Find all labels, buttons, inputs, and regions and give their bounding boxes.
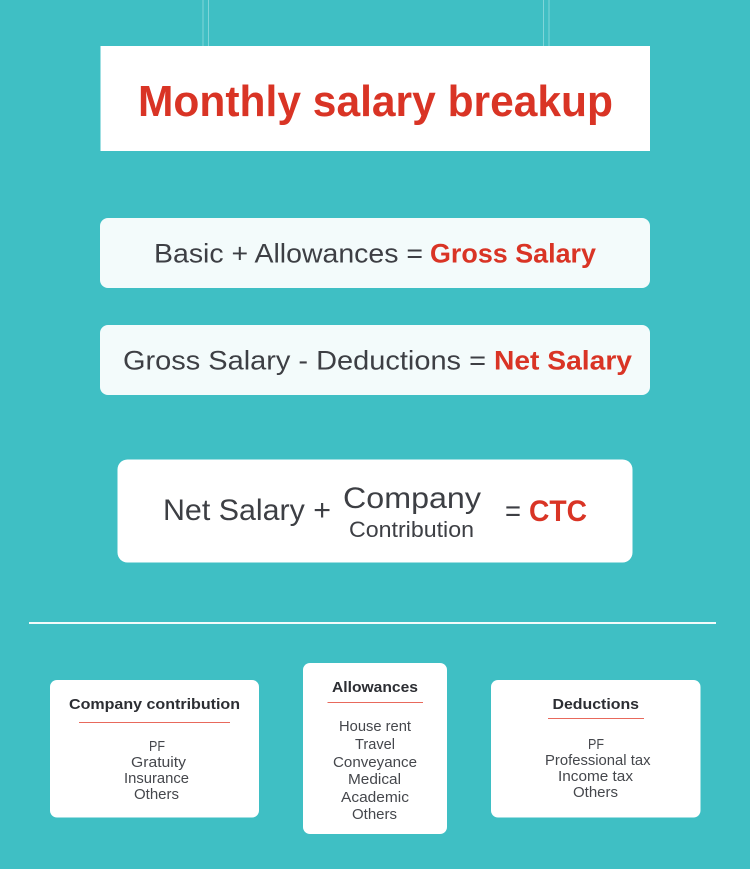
panel: deductions: Professional tax — [545, 753, 651, 769]
heading: company contribution: Company contribution — [69, 696, 240, 713]
panel: deductions: Income tax — [558, 769, 634, 785]
title banner — [100, 46, 650, 151]
formula: net salary: Gross Salary - Deductions = — [123, 346, 486, 376]
formula: CTC: Contribution — [349, 517, 474, 542]
panel: allowances: Conveyance — [333, 755, 417, 771]
panel: deductions — [491, 680, 700, 818]
formula: gross salary: Basic + Allowances = — [154, 238, 423, 268]
title: Monthly salary breakup — [138, 77, 613, 126]
panel: deductions: PF — [588, 737, 604, 753]
heading: allowances: Allowances — [332, 679, 418, 696]
formula: gross salary — [100, 218, 650, 288]
panel: company contribution — [50, 680, 259, 818]
formula: CTC: CTC — [529, 495, 587, 528]
panel: allowances: House rent — [339, 719, 411, 735]
panel: company contribution: PF — [149, 739, 165, 755]
panel: allowances: Others — [352, 807, 397, 823]
formula: net salary: Net Salary — [494, 346, 632, 376]
formula: CTC: Company — [343, 482, 481, 515]
panel: company contribution: Gratuity — [131, 755, 187, 771]
panel: allowances: Academic — [341, 790, 409, 806]
panel: deductions: Others — [573, 785, 618, 801]
formula: gross salary: Gross Salary — [430, 238, 596, 268]
formula: CTC — [118, 460, 632, 562]
formula: CTC: Net Salary + — [163, 494, 331, 527]
panel: allowances: Medical — [348, 772, 401, 788]
formula: net salary — [100, 325, 650, 395]
heading: deductions: Deductions — [552, 696, 639, 713]
panel: company contribution: Insurance — [124, 771, 189, 787]
panel: allowances: Travel — [355, 737, 395, 753]
panel: company contribution: Others — [134, 787, 179, 803]
panel: allowances — [303, 663, 447, 834]
formula: CTC: = — [505, 495, 521, 528]
